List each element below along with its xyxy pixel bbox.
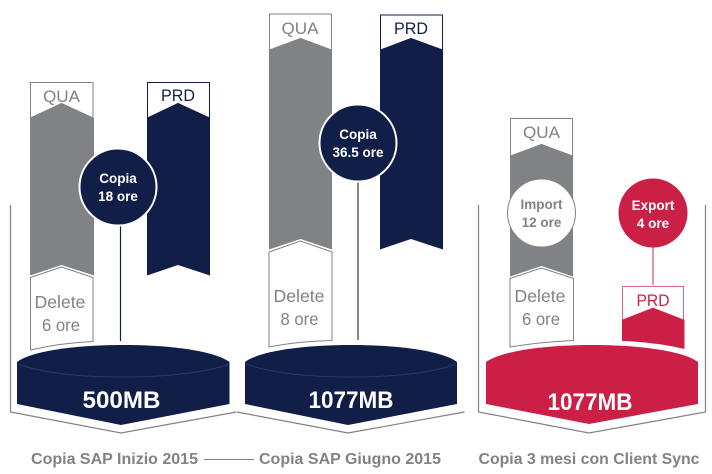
panel outline [10, 82, 236, 433]
cylinder 1077MB red [486, 345, 698, 424]
circle: Copia 18 ore [80, 148, 156, 226]
cylinder 1077MB: 1077MB [308, 387, 394, 414]
circle: Copia 36.5 ore: Copia [339, 127, 377, 142]
PRD bar: PRD [394, 19, 428, 38]
cylinder 1077MB [245, 345, 457, 425]
PRD bar: PRD [636, 291, 670, 310]
Delete box: 8 ore [280, 309, 318, 329]
Delete box: Delete [34, 292, 86, 312]
PRD bar [147, 82, 210, 276]
QUA bar [30, 82, 94, 276]
Delete box [510, 268, 574, 347]
panel: Copia SAP Inizio 2015 [10, 82, 236, 433]
cylinder 500MB: 500MB [82, 387, 160, 414]
caption: Copia SAP Inizio 2015: Copia SAP Inizio 2015 [31, 451, 198, 468]
Delete box: Delete [274, 286, 324, 306]
panel outline [237, 82, 464, 433]
circle: Copia 18 ore: Copia [99, 171, 137, 186]
Delete box: 6 ore [42, 315, 80, 335]
circle: Copia 18 ore: 18 ore [98, 189, 138, 204]
PRD bar [622, 286, 684, 349]
connector line [120, 224, 122, 341]
cylinder 500MB [17, 345, 230, 425]
Delete box: Delete [514, 286, 566, 306]
PRD bar [380, 15, 443, 250]
circle: Import 12 ore [508, 179, 576, 247]
circle: Export 4 ore: 4 ore [637, 216, 670, 231]
connector line [357, 180, 359, 340]
panel: Copia SAP Giugno 2015 [237, 14, 464, 433]
caption connector [204, 458, 254, 460]
QUA bar: QUA [523, 123, 561, 142]
caption: Copia 3 mesi con Client Sync: Copia 3 mesi con Client Sync [478, 451, 700, 468]
circle: Export 4 ore: Export [632, 198, 675, 213]
PRD bar: PRD [161, 86, 195, 105]
Delete box [269, 241, 332, 347]
QUA bar: QUA [43, 87, 81, 106]
Delete box [30, 267, 93, 350]
caption: Copia SAP Giugno 2015: Copia SAP Giugno 2015 [259, 451, 441, 468]
Delete box: 6 ore [522, 309, 560, 329]
QUA bar [269, 14, 332, 250]
QUA bar: QUA [282, 19, 319, 38]
panel outline [478, 205, 706, 433]
circle: Import 12 ore: Import [520, 197, 563, 212]
circle: Import 12 ore: 12 ore [522, 215, 562, 230]
circle: Export 4 ore [618, 178, 688, 248]
QUA bar [510, 118, 573, 276]
circle: Copia 36.5 ore: 36.5 ore [332, 145, 384, 160]
circle: Copia 36.5 ore [320, 104, 396, 182]
panel: Copia 3 mesi con Client Sync [478, 118, 706, 433]
cylinder 1077MB red: 1077MB [548, 389, 632, 416]
connector line [652, 246, 654, 285]
